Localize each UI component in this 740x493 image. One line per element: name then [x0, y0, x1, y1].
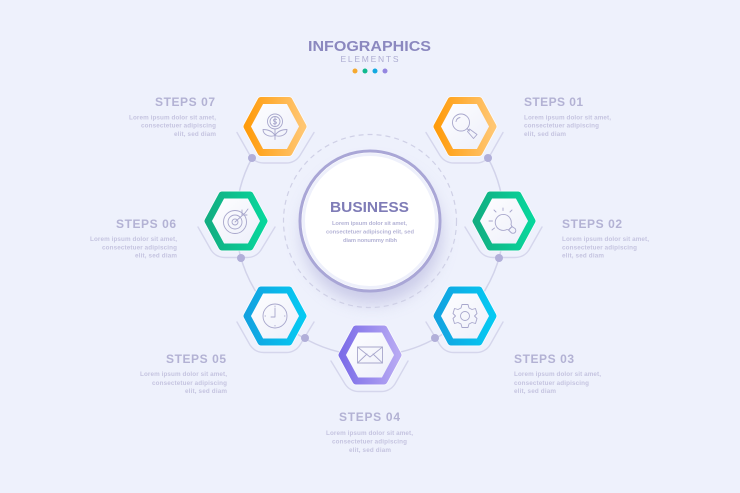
step 05 hexagon — [237, 290, 314, 352]
dashed ring — [284, 134, 456, 308]
step 02 text: STEPS 02 — [562, 217, 622, 231]
icon: clock — [263, 304, 287, 328]
step 07 hexagon — [237, 100, 314, 163]
step 04 text: Lorem ipsum dolor sit amet, — [326, 430, 413, 437]
step 05 text: elit, sed diam — [185, 388, 227, 395]
step 04 text — [326, 410, 413, 454]
icon: envelope — [358, 347, 382, 363]
icon: magnifier — [452, 114, 477, 138]
step 03 dot — [431, 334, 439, 342]
step 01 dot — [484, 154, 492, 162]
step 03 text: STEPS 03 — [514, 352, 574, 366]
step 07 text: STEPS 07 — [155, 95, 215, 109]
step 07 text: consectetuer adipiscing — [141, 122, 216, 130]
central circle shadow — [302, 164, 442, 304]
step 03 text — [514, 352, 601, 395]
title: INFOGRAPHICS — [308, 39, 431, 55]
step 07 dot — [248, 154, 256, 162]
central circle — [300, 151, 440, 291]
step 02 text: Lorem ipsum dolor sit amet, — [562, 236, 649, 243]
step 06 text: STEPS 06 — [116, 217, 176, 231]
step 02 text: consectetuer adipiscing — [562, 244, 637, 252]
step 04 hexagon — [331, 329, 408, 392]
step 06 dot — [237, 254, 245, 262]
step 01 hexagon — [426, 100, 503, 163]
step 02 text — [562, 217, 649, 260]
business heading: BUSINESS — [330, 200, 409, 216]
business text — [326, 221, 414, 244]
step 01 text: Lorem ipsum dolor sit amet, — [524, 114, 611, 122]
title colour dots — [352, 68, 388, 74]
step 02 dot — [495, 254, 503, 262]
step 07 text — [129, 95, 216, 138]
step 01 text: STEPS 01 — [524, 95, 583, 109]
connector arc — [236, 158, 504, 355]
step 01 text: elit, sed diam — [524, 131, 566, 138]
step 02 text: elit, sed diam — [562, 252, 604, 260]
step 03 text: Lorem ipsum dolor sit amet, — [514, 371, 601, 378]
icon: money plant — [263, 114, 287, 140]
icon: gear — [453, 304, 477, 328]
icon: light bulb — [489, 208, 516, 233]
business text: diam nonummy nibh — [343, 238, 397, 244]
business text: Lorem ipsum dolor sit amet, — [332, 221, 407, 227]
step 01 text — [524, 95, 611, 138]
step 01 text: consectetuer adipiscing — [524, 122, 599, 130]
step 07 text: Lorem ipsum dolor sit amet, — [129, 114, 216, 122]
step 05 text: consectetuer adipiscing — [152, 380, 227, 387]
step 05 dot — [301, 334, 309, 342]
step 05 text: Lorem ipsum dolor sit amet, — [140, 371, 227, 378]
step 03 text: consectetuer adipiscing — [514, 380, 589, 387]
step 04 text: STEPS 04 — [339, 410, 400, 424]
icon: target — [224, 209, 248, 234]
business text: consectetuer adipiscing elit, sed — [326, 230, 414, 236]
title: ELEMENTS — [340, 54, 399, 64]
step 03 hexagon — [426, 290, 503, 352]
step 06 text — [90, 217, 177, 260]
step 05 text: STEPS 05 — [166, 352, 226, 366]
step 04 text: elit, sed diam — [349, 447, 391, 454]
step 06 text: elit, sed diam — [135, 252, 177, 260]
step 05 text — [140, 352, 227, 395]
step 04 text: consectetuer adipiscing — [332, 438, 407, 446]
step 03 text: elit, sed diam — [514, 388, 556, 395]
step 06 text: consectetuer adipiscing — [102, 244, 177, 252]
step 02 hexagon — [465, 195, 542, 258]
step 06 hexagon — [198, 195, 275, 258]
step 07 text: elit, sed diam — [174, 131, 216, 138]
title — [308, 39, 431, 64]
step 06 text: Lorem ipsum dolor sit amet, — [90, 236, 177, 243]
